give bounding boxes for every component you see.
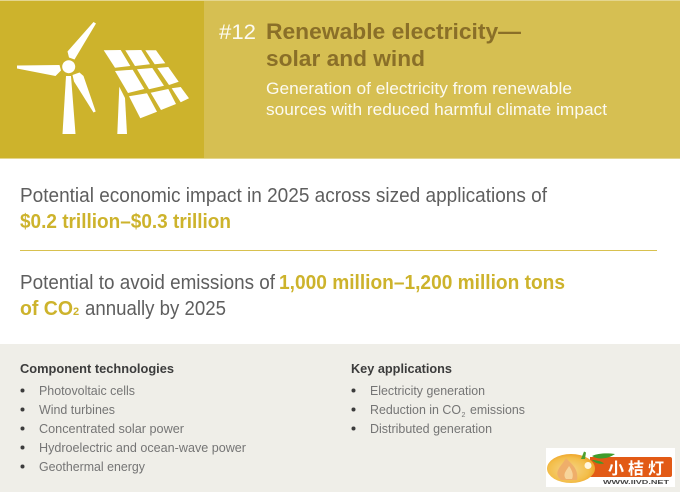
component technologies list: Geothermal energy: [39, 460, 146, 474]
economic impact text: Potential economic impact in 2025 across sized applications of: [20, 185, 547, 207]
watermark logo: [546, 448, 675, 487]
key applications list: 2: [462, 412, 466, 419]
key applications list: Distributed generation: [370, 422, 492, 436]
economic impact text: $0.2 trillion–$0.3 trillion: [20, 211, 231, 233]
component technologies list: [20, 361, 246, 474]
subtitle: [266, 80, 607, 119]
component technologies list: Component technologies: [20, 361, 174, 376]
title: [266, 19, 521, 71]
icon: solar panel: [104, 50, 189, 134]
key applications list: Reduction in CO: [370, 403, 461, 417]
emissions text: 2: [73, 306, 79, 318]
emissions text: 1,000 million–1,200 million tons: [279, 272, 565, 294]
emissions text: Potential to avoid emissions of: [20, 272, 275, 294]
subtitle: Generation of electricity from renewable: [266, 80, 572, 98]
heading number: #12: [219, 21, 256, 44]
icon: wind turbine: [17, 22, 96, 134]
economic impact text: [20, 185, 547, 233]
component technologies list: Wind turbines: [39, 403, 115, 417]
key applications list: Key applications: [351, 361, 452, 376]
subtitle: sources with reduced harmful climate impact: [266, 101, 607, 119]
key applications list: emissions: [470, 403, 525, 417]
emissions text: annually by 2025: [85, 298, 226, 320]
header banner: [0, 0, 680, 159]
emissions text: [20, 272, 565, 320]
logo: orange fruit: [547, 452, 615, 483]
key applications list: Electricity generation: [370, 384, 485, 398]
emissions text: of CO: [20, 298, 73, 320]
key applications list: [351, 361, 525, 436]
component technologies list: Photovoltaic cells: [39, 384, 135, 398]
logo: web address: WWW.IIVD.NET: [603, 480, 669, 486]
component technologies list: Concentrated solar power: [39, 422, 184, 436]
title: Renewable electricity—: [266, 19, 521, 44]
logo: name banner: 小桔灯: [608, 455, 664, 479]
panel: details: [0, 344, 680, 492]
title: solar and wind: [266, 46, 425, 71]
component technologies list: Hydroelectric and ocean-wave power: [39, 441, 246, 455]
